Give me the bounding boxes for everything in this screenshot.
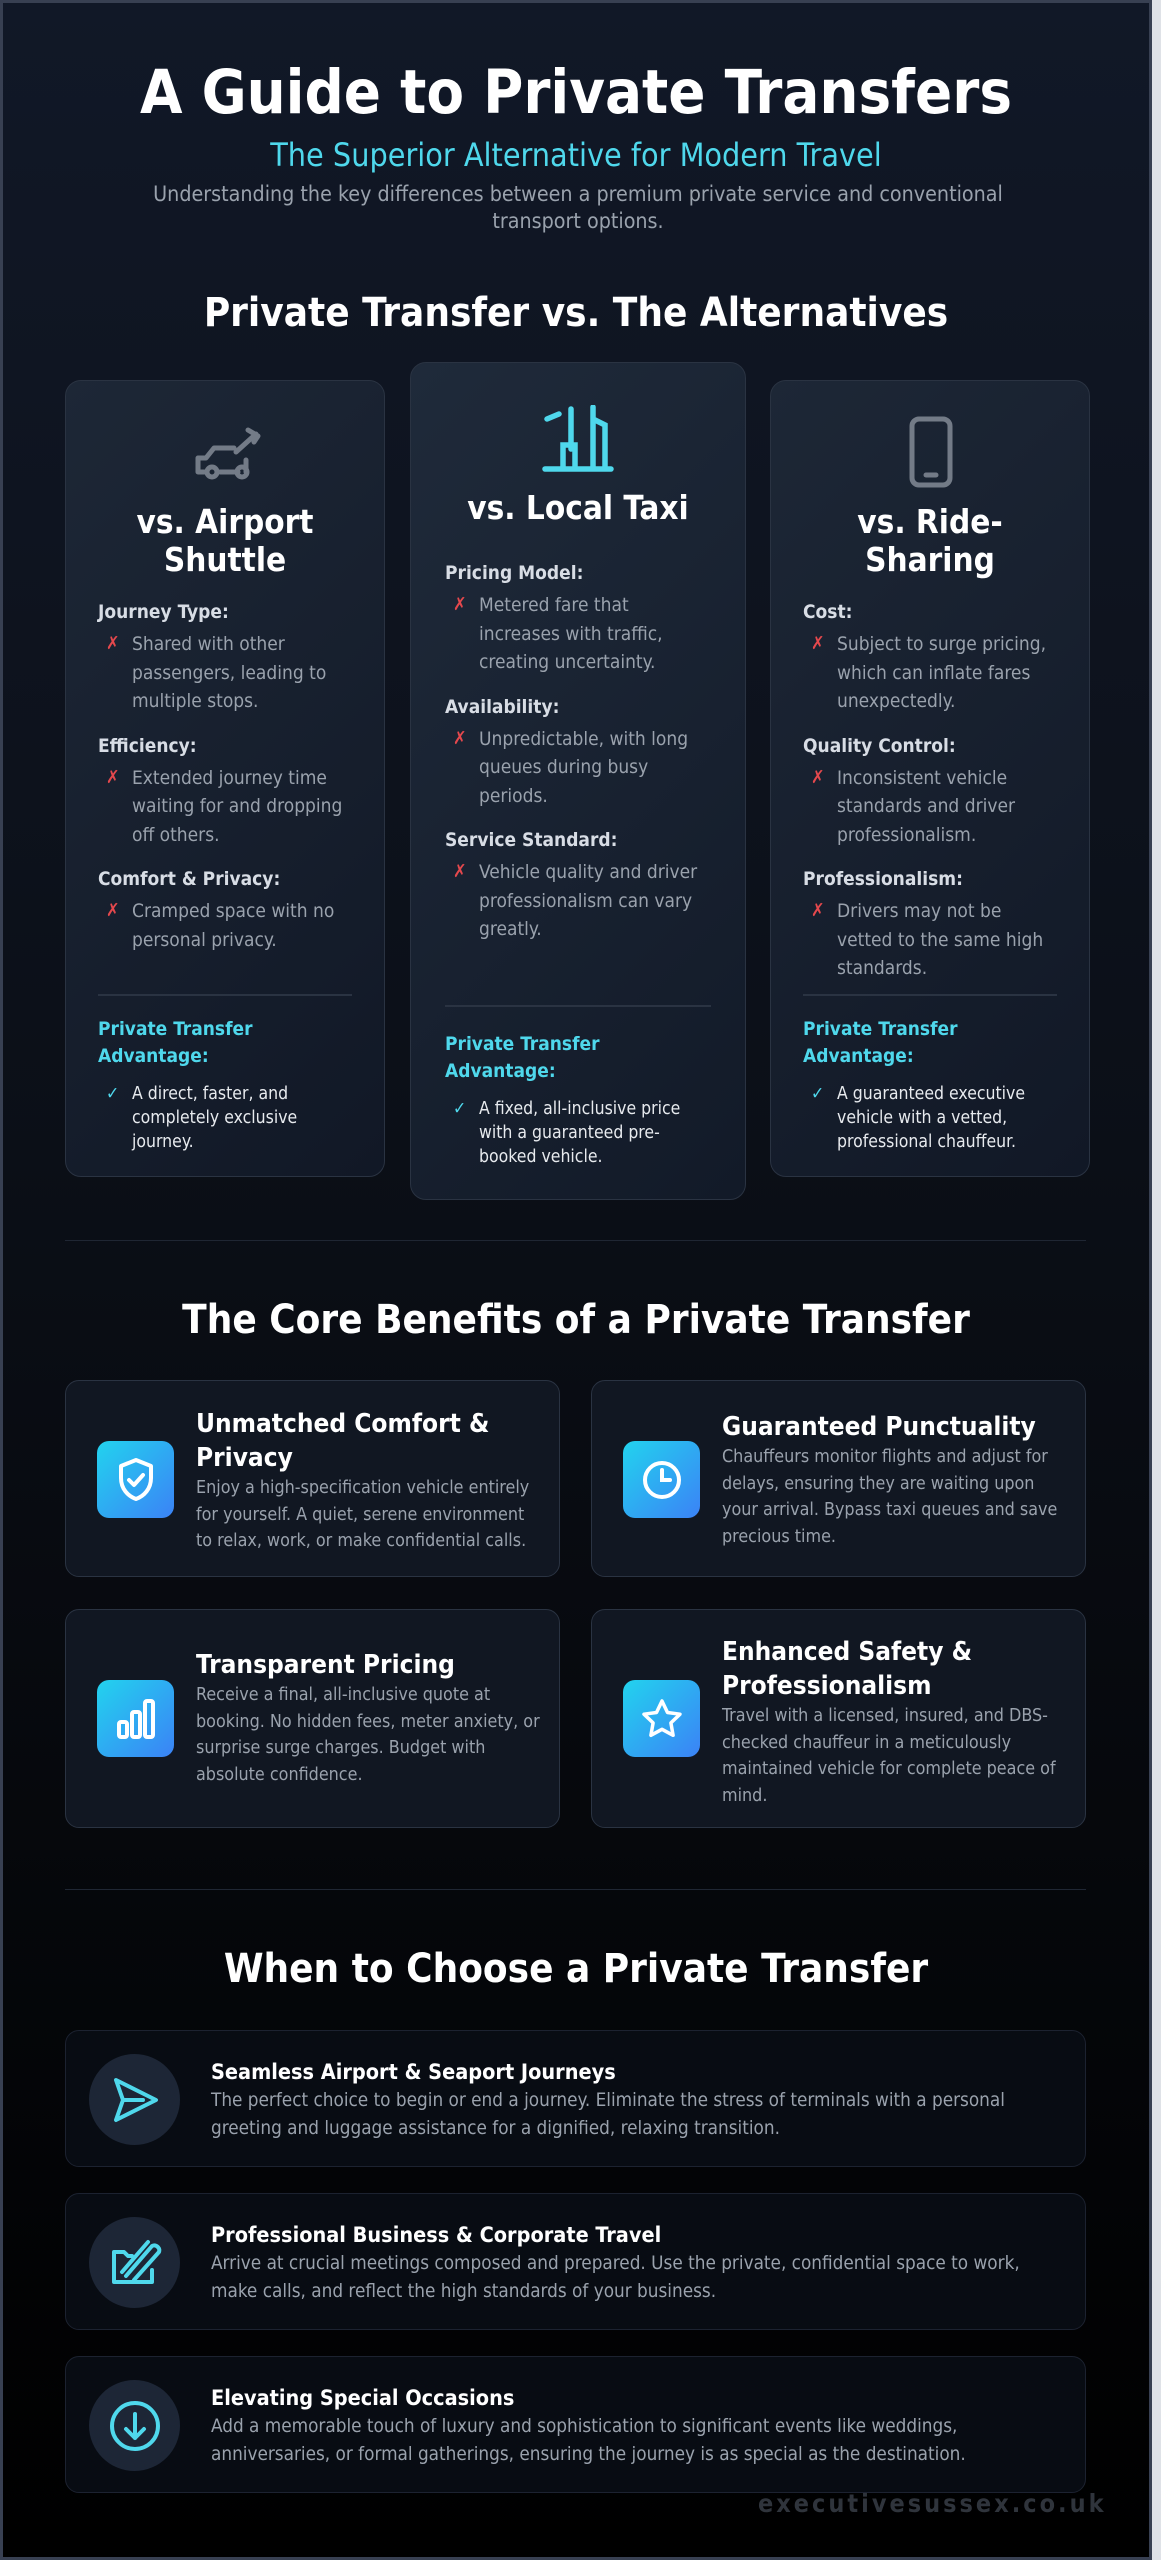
- panel: ride-sharing: Professionalism:: [803, 868, 963, 890]
- panel: airport shuttle: Extended journey time waiting for and dropping off others.: [132, 766, 342, 846]
- intro text: Understanding the key differences between a premium private service and conventional transport options.: [153, 182, 1003, 234]
- watermark: executivesussex.co.uk: [758, 2489, 1107, 2518]
- benefit: comfort: Unmatched Comfort & Privacy: [196, 1409, 489, 1473]
- icon: shuttle: [196, 428, 260, 480]
- panel: local taxi: ✗: [453, 861, 467, 882]
- subtitle: The Superior Alternative for Modern Travel: [270, 136, 882, 174]
- panel: airport shuttle: [65, 380, 385, 1177]
- benefit: safety: Travel with a licensed, insured, and DBS-checked chauffeur in a meticulously maintained vehicle for complete peace of mind.: [722, 1705, 1056, 1806]
- section heading: when to choose: When to Choose a Private Transfer: [224, 1946, 928, 1992]
- panel: airport shuttle: ✗: [106, 900, 120, 921]
- panel: ride-sharing: Quality Control:: [803, 734, 956, 756]
- use case: occasions: [65, 2356, 1086, 2493]
- icon: arrow down circle: [89, 2380, 180, 2471]
- use case: airport: [65, 2030, 1086, 2167]
- panel: local taxi: Availability:: [445, 696, 559, 718]
- icon: clock: [623, 1441, 700, 1518]
- benefit: punctuality: Chauffeurs monitor flights and adjust for delays, ensuring they are waiting upon your arrival. Bypass taxi queues and save precious time.: [722, 1446, 1057, 1546]
- benefit: punctuality: [591, 1380, 1086, 1577]
- panel: local taxi: Pricing Model:: [445, 562, 583, 584]
- panel: local taxi: ✗: [453, 594, 467, 615]
- panel: local taxi: Vehicle quality and driver professionalism can vary greatly.: [479, 861, 697, 940]
- benefit: pricing: Transparent Pricing: [196, 1650, 455, 1680]
- panel: airport shuttle: ✓: [106, 1084, 119, 1104]
- benefit: pricing: [65, 1609, 560, 1828]
- use case: business: Professional Business & Corporate Travel: [211, 2223, 661, 2248]
- icon: phone: [910, 416, 952, 488]
- title: A Guide to Private Transfers: [140, 57, 1012, 128]
- icon: bars: [97, 1680, 174, 1757]
- benefit: pricing: Receive a final, all-inclusive quote at booking. No hidden fees, meter anxiety, or surprise surge charges. Budget with absolute confidence.: [196, 1684, 540, 1784]
- panel: local taxi: A fixed, all-inclusive price with a guaranteed pre-booked vehicle.: [479, 1099, 680, 1167]
- heading: vs. Ride-Sharing: [857, 502, 1003, 579]
- benefit: punctuality: Guaranteed Punctuality: [722, 1412, 1036, 1442]
- panel: local taxi: Metered fare that increases with traffic, creating uncertainty.: [479, 594, 663, 673]
- icon: briefcase pen: [89, 2217, 180, 2308]
- panel: ride-sharing: Subject to surge pricing, which can inflate fares unexpectedly.: [837, 633, 1046, 712]
- panel: local taxi: [410, 362, 746, 1200]
- use case: occasions: Add a memorable touch of luxury and sophistication to significant events like weddings, anniversaries, or formal gatherings, ensuring the journey is as special as the destination.: [211, 2416, 966, 2465]
- icon: star: [623, 1680, 700, 1757]
- panel: ride-sharing: ✗: [811, 633, 825, 654]
- section heading: benefits: The Core Benefits of a Private Transfer: [182, 1297, 970, 1343]
- use case: airport: The perfect choice to begin or end a journey. Eliminate the stress of terminals with a personal greeting and luggage assistance for a dignified, relaxing transition.: [211, 2090, 1005, 2139]
- panel: local taxi: Unpredictable, with long queues during busy periods.: [479, 728, 688, 806]
- panel: local taxi: Service Standard:: [445, 829, 617, 851]
- panel: ride-sharing: Cost:: [803, 601, 852, 623]
- icon: shield: [97, 1441, 174, 1518]
- panel: local taxi: ✓: [453, 1099, 466, 1119]
- panel: airport shuttle: Shared with other passengers, leading to multiple stops.: [132, 633, 326, 712]
- panel: airport shuttle: Journey Type:: [98, 601, 229, 623]
- panel: airport shuttle: A direct, faster, and completely exclusive journey.: [132, 1084, 297, 1152]
- panel: ride-sharing: ✓: [811, 1084, 824, 1104]
- benefit: comfort: [65, 1380, 560, 1577]
- panel: ride-sharing: ✗: [811, 900, 825, 921]
- advantage: Private Transfer Advantage:: [98, 1018, 253, 1067]
- use case: business: [65, 2193, 1086, 2330]
- panel: ride-sharing: ✗: [811, 766, 825, 788]
- icon: taxi chart: [542, 405, 614, 472]
- advantage: Private Transfer Advantage:: [803, 1018, 958, 1067]
- panel: local taxi: ✗: [453, 728, 467, 748]
- use case: business: Arrive at crucial meetings composed and prepared. Use the private, confidential space to work, make calls, and reflect the high standards of your business.: [211, 2253, 1020, 2302]
- heading: vs. Airport Shuttle: [137, 502, 313, 579]
- advantage: Private Transfer Advantage:: [445, 1033, 600, 1082]
- benefit: safety: Enhanced Safety & Professionalism: [722, 1637, 972, 1701]
- benefit: safety: [591, 1609, 1086, 1828]
- panel: airport shuttle: Efficiency:: [98, 734, 197, 756]
- section heading: alternatives: Private Transfer vs. The Alternatives: [204, 290, 948, 336]
- heading: vs. Local Taxi: [467, 488, 689, 527]
- panel: ride-sharing: A guaranteed executive vehicle with a vetted, professional chauffeur.: [837, 1084, 1025, 1152]
- panel: ride-sharing: [770, 380, 1090, 1177]
- panel: airport shuttle: Cramped space with no personal privacy.: [132, 900, 334, 950]
- icon: send: [89, 2054, 180, 2145]
- panel: ride-sharing: Inconsistent vehicle standards and driver professionalism.: [837, 766, 1015, 846]
- panel: airport shuttle: ✗: [106, 766, 120, 788]
- benefit: comfort: Enjoy a high-specification vehicle entirely for yourself. A quiet, serene environment to relax, work, or make confidential calls.: [196, 1477, 529, 1551]
- use case: occasions: Elevating Special Occasions: [211, 2386, 514, 2411]
- panel: airport shuttle: ✗: [106, 633, 120, 654]
- panel: airport shuttle: Comfort & Privacy:: [98, 868, 280, 890]
- use case: airport: Seamless Airport & Seaport Journeys: [211, 2060, 616, 2085]
- panel: ride-sharing: Drivers may not be vetted to the same high standards.: [837, 900, 1043, 979]
